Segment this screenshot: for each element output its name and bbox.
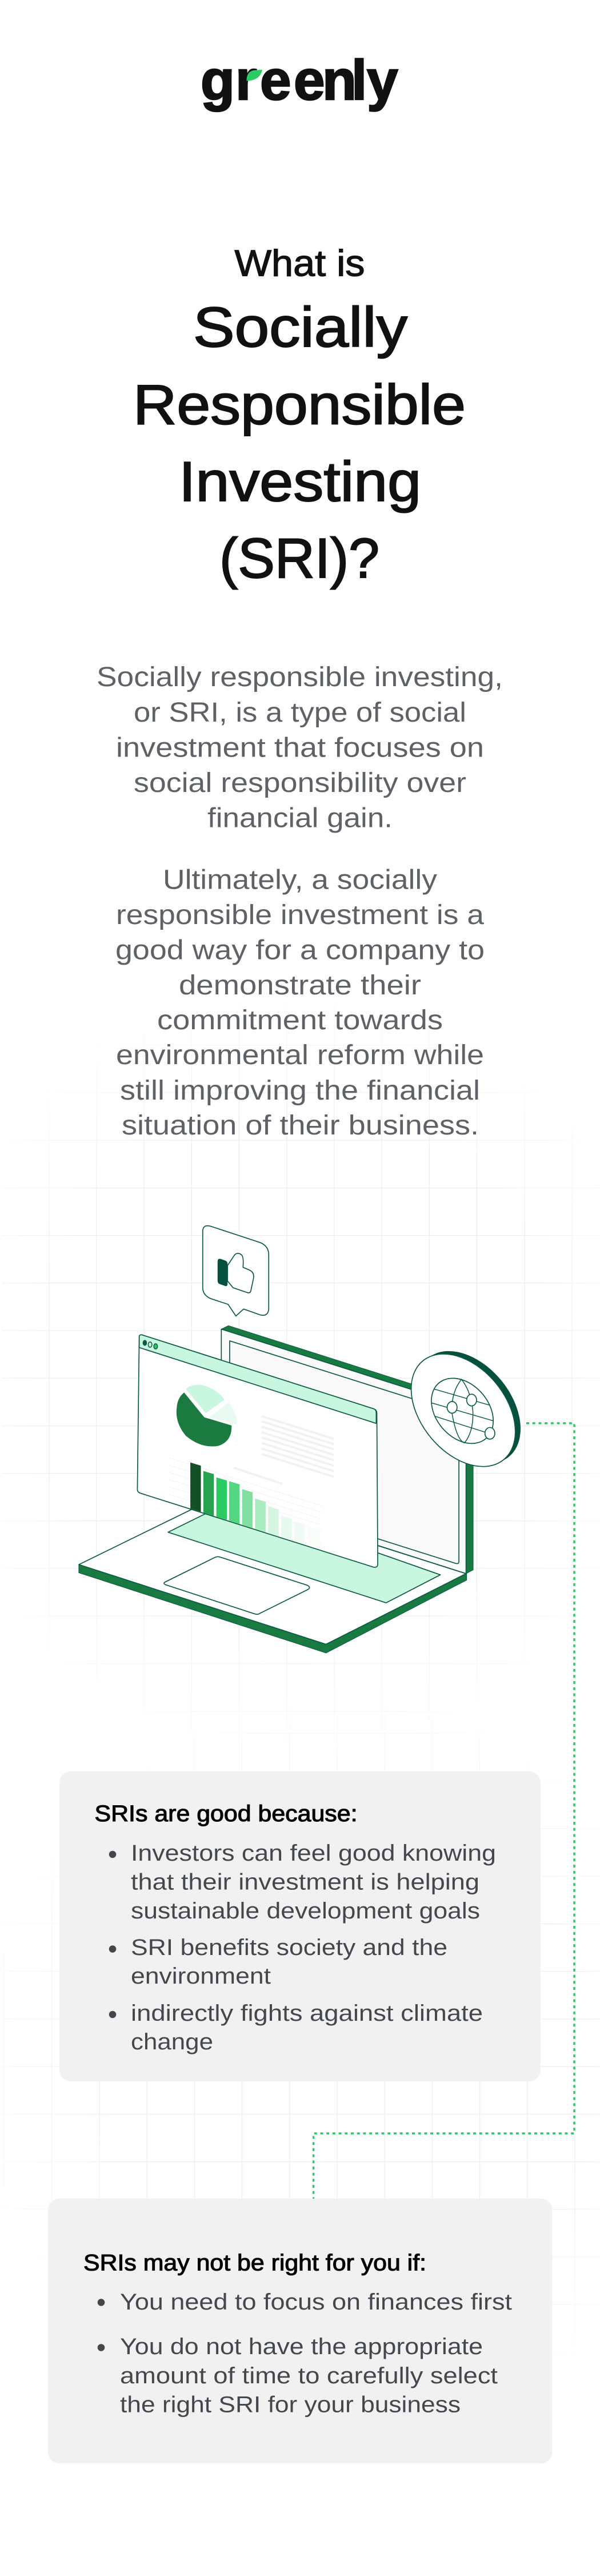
text block: why SRI is worthwhile: Ultimately, a socially bbox=[163, 865, 437, 895]
bullet list: You need to focus on finances first bbox=[120, 2290, 512, 2315]
icon: globe badge bbox=[410, 1351, 521, 1467]
title line: What is: What is bbox=[234, 242, 365, 284]
bullet list: amount of time to carefully select bbox=[120, 2363, 498, 2388]
text block: why SRI is worthwhile: good way for a company to bbox=[115, 935, 485, 966]
laptop screen bbox=[221, 1325, 473, 1574]
title line: (SRI)?: (SRI)? bbox=[219, 527, 379, 590]
text block: why SRI is worthwhile bbox=[115, 865, 485, 1141]
text block: why SRI is worthwhile: situation of their business. bbox=[122, 1110, 479, 1141]
logo: greenly: greenly bbox=[201, 49, 398, 112]
arrow: dotted connector between illustration and cards bbox=[314, 1423, 574, 2199]
bullet list bbox=[109, 1841, 496, 2055]
text block: SRI definition bbox=[97, 662, 503, 834]
illustration: laptop with charts bbox=[79, 1226, 542, 1653]
text block: SRI definition: financial gain. bbox=[207, 803, 393, 834]
laptop base bbox=[79, 1495, 467, 1653]
text block: why SRI is worthwhile: environmental reform while bbox=[116, 1040, 484, 1070]
bullet list: indirectly fights against climate bbox=[131, 2001, 483, 2026]
bullet list: SRI benefits society and the bbox=[131, 1935, 447, 1960]
bullet list: Investors can feel good knowing bbox=[131, 1841, 496, 1866]
text block: why SRI is worthwhile: commitment towards bbox=[157, 1005, 443, 1036]
title line: Responsible: Responsible bbox=[133, 373, 466, 436]
text block: SRI definition: investment that focuses on bbox=[116, 733, 484, 763]
text placeholder lines bbox=[234, 1416, 334, 1484]
bullet list: change bbox=[131, 2029, 213, 2055]
text block: SRI definition: social responsibility over bbox=[134, 768, 466, 798]
text block: SRI definition: Socially responsible investing, bbox=[97, 662, 503, 692]
panel: SRIs may not be right for you bbox=[48, 2199, 552, 2463]
panel heading: SRIs may not be right for you if: bbox=[83, 2251, 426, 2276]
icon: thumbs up speech bubble bbox=[203, 1226, 269, 1316]
title bbox=[133, 242, 466, 590]
window title bar bbox=[139, 1335, 376, 1423]
text block: why SRI is worthwhile: demonstrate their bbox=[179, 970, 421, 1001]
icon: green leaf on logo bbox=[246, 70, 262, 81]
bar chart bbox=[168, 1458, 321, 1548]
title line: Investing: Investing bbox=[179, 450, 421, 513]
panel: SRIs are good because bbox=[59, 1771, 541, 2081]
bullet list: that their investment is helping bbox=[131, 1870, 479, 1895]
title line: Socially: Socially bbox=[193, 296, 407, 359]
browser window bbox=[137, 1335, 378, 1567]
bullet list: sustainable development goals bbox=[131, 1898, 480, 1924]
text block: why SRI is worthwhile: still improving the financial bbox=[120, 1076, 480, 1106]
bullet list: environment bbox=[131, 1964, 271, 1989]
text block: why SRI is worthwhile: responsible investment is a bbox=[116, 900, 484, 930]
bullet list: You do not have the appropriate bbox=[120, 2334, 483, 2359]
keyboard bbox=[168, 1502, 441, 1603]
bullet list bbox=[98, 2290, 512, 2418]
panel heading: SRIs are good because: bbox=[95, 1801, 358, 1826]
trackpad bbox=[164, 1556, 310, 1614]
pie chart bbox=[177, 1385, 237, 1446]
text block: SRI definition: or SRI, is a type of social bbox=[134, 698, 466, 728]
bullet list: the right SRI for your business bbox=[120, 2392, 461, 2418]
